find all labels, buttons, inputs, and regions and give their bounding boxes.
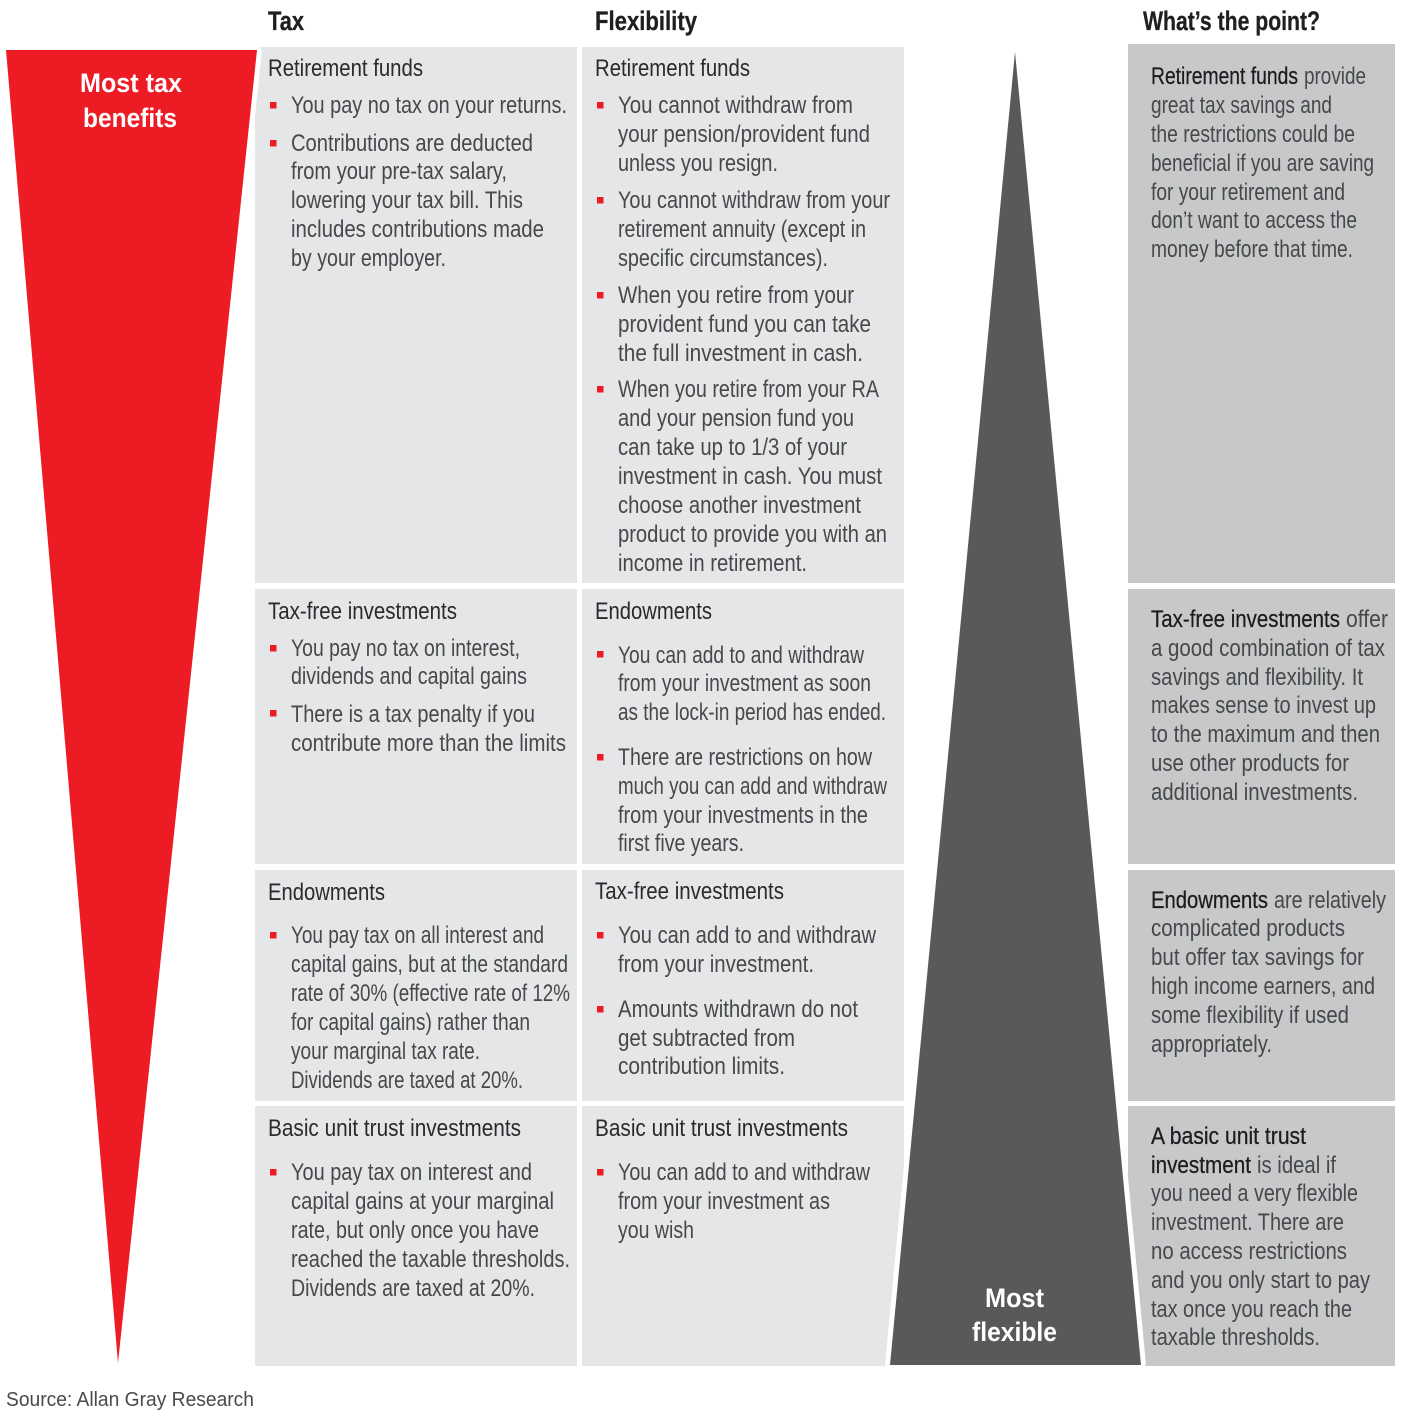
panel: tax, tax-free investments bbox=[255, 589, 577, 864]
triangle label: flexible bbox=[972, 1317, 1057, 1347]
bullet point: specific circumstances). bbox=[618, 245, 828, 272]
bullet point bbox=[597, 996, 858, 1080]
panel: flexibility, retirement funds bbox=[582, 47, 904, 583]
explanation text: complicated products bbox=[1151, 915, 1345, 942]
bullet point: your pension/provident fund bbox=[618, 121, 870, 148]
explanation text: use other products for bbox=[1151, 750, 1349, 777]
panel: point, endowments bbox=[1128, 870, 1395, 1101]
panel background bbox=[255, 47, 577, 583]
explanation text: you need a very flexible bbox=[1151, 1180, 1358, 1207]
explanation text: taxable thresholds. bbox=[1151, 1324, 1320, 1351]
bullet point bbox=[597, 922, 877, 978]
triangle label: Most tax bbox=[80, 68, 182, 98]
triangle shape bbox=[6, 50, 257, 1363]
bullet point: You pay no tax on your returns. bbox=[291, 92, 567, 119]
bullet point bbox=[270, 701, 566, 757]
panel background bbox=[255, 1106, 577, 1366]
bullet point: investment in cash. You must bbox=[618, 463, 882, 490]
panel background bbox=[255, 589, 577, 864]
bullet point bbox=[270, 1159, 570, 1302]
explanation text: provide bbox=[1304, 63, 1366, 90]
panel background bbox=[1128, 1106, 1395, 1366]
bullet point: income in retirement. bbox=[618, 550, 807, 577]
bullet point: rate, but only once you have bbox=[291, 1217, 539, 1244]
bullet point: the full investment in cash. bbox=[618, 340, 863, 367]
heading: Tax: Tax bbox=[268, 6, 304, 36]
bullet point: reached the taxable thresholds. bbox=[291, 1246, 570, 1273]
explanation text: additional investments. bbox=[1151, 779, 1358, 806]
red triangle: most tax benefits bbox=[6, 50, 257, 1363]
bullet point bbox=[597, 744, 888, 857]
panel title: Endowments bbox=[595, 598, 712, 625]
bullet point: You cannot withdraw from bbox=[618, 92, 853, 119]
explanation text bbox=[1151, 606, 1388, 806]
bullet point: You pay tax on all interest and bbox=[291, 922, 544, 949]
panel title: Retirement funds bbox=[268, 55, 423, 82]
panel background bbox=[582, 589, 904, 864]
explanation text: is ideal if bbox=[1257, 1152, 1336, 1179]
bullet point: capital gains, but at the standard bbox=[291, 951, 568, 978]
bullet point: from your investment. bbox=[618, 951, 814, 978]
explanation text: A basic unit trust bbox=[1151, 1123, 1306, 1150]
explanation text: investment. There are bbox=[1151, 1209, 1344, 1236]
panel background bbox=[1128, 44, 1395, 583]
heading: Flexibility: Flexibility bbox=[595, 6, 697, 36]
triangle label bbox=[972, 1283, 1057, 1347]
bullet point: from your investments in the bbox=[618, 802, 868, 829]
bullet point: You can add to and withdraw bbox=[618, 922, 877, 949]
bullet point: You pay no tax on interest, bbox=[291, 635, 520, 662]
explanation text: don’t want to access the bbox=[1151, 207, 1357, 234]
panel: flexibility, endowments bbox=[582, 589, 904, 864]
bullet point bbox=[270, 130, 544, 272]
bullet point bbox=[597, 642, 886, 726]
bullet point: lowering your tax bill. This bbox=[291, 187, 523, 214]
bullet point: When you retire from your RA bbox=[618, 376, 879, 403]
explanation text: investment bbox=[1151, 1152, 1251, 1179]
explanation text bbox=[1151, 1123, 1370, 1351]
bullet point bbox=[597, 1159, 871, 1244]
heading: What's the point?: What’s the point? bbox=[1143, 6, 1320, 36]
bullet point: You can add to and withdraw bbox=[618, 1159, 871, 1186]
explanation text: appropriately. bbox=[1151, 1031, 1272, 1058]
bullet point bbox=[597, 282, 871, 367]
bullet point: your marginal tax rate. bbox=[291, 1038, 480, 1065]
bullet point: first five years. bbox=[618, 830, 744, 857]
explanation text bbox=[1151, 887, 1386, 1058]
panel background bbox=[582, 870, 904, 1101]
panel background bbox=[582, 47, 904, 583]
bullet point bbox=[597, 376, 887, 577]
panel title: Basic unit trust investments bbox=[268, 1115, 521, 1142]
bullet point bbox=[270, 635, 527, 690]
bullet point: dividends and capital gains bbox=[291, 663, 527, 690]
panel title: Retirement funds bbox=[595, 55, 750, 82]
panel title: Tax-free investments bbox=[595, 878, 784, 905]
bullet point: contribution limits. bbox=[618, 1053, 785, 1080]
explanation text: savings and flexibility. It bbox=[1151, 664, 1363, 691]
bullet point: for capital gains) rather than bbox=[291, 1009, 530, 1036]
bullet point: You can add to and withdraw bbox=[618, 642, 865, 669]
bullet point: You pay tax on interest and bbox=[291, 1159, 532, 1186]
bullet point: retirement annuity (except in bbox=[618, 216, 866, 243]
panel background bbox=[255, 870, 577, 1101]
bullet point: capital gains at your marginal bbox=[291, 1188, 554, 1215]
panel: tax, endowments bbox=[255, 870, 577, 1101]
explanation text: Endowments bbox=[1151, 887, 1268, 914]
explanation text: the restrictions could be bbox=[1151, 121, 1355, 148]
bullet point: When you retire from your bbox=[618, 282, 854, 309]
panel background bbox=[1128, 589, 1395, 864]
bullet point: by your employer. bbox=[291, 245, 446, 272]
bullet point: choose another investment bbox=[618, 492, 861, 519]
bullet point: rate of 30% (effective rate of 12% bbox=[291, 980, 570, 1007]
panel: tax, basic unit trust investments bbox=[255, 1106, 577, 1366]
bullet point: and your pension fund you bbox=[618, 405, 854, 432]
bullet point: Dividends are taxed at 20%. bbox=[291, 1067, 523, 1094]
bullet point: you wish bbox=[618, 1217, 694, 1244]
panel: point, retirement funds bbox=[1128, 44, 1395, 583]
bullet point: can take up to 1/3 of your bbox=[618, 434, 847, 461]
bullet point: provident fund you can take bbox=[618, 311, 871, 338]
panel: point, basic unit trust investment bbox=[1128, 1106, 1395, 1366]
panel background bbox=[582, 1106, 904, 1366]
explanation text bbox=[1151, 63, 1374, 263]
grey triangle: most flexible bbox=[890, 52, 1141, 1365]
bullet point: You cannot withdraw from your bbox=[618, 187, 890, 214]
bullet point bbox=[597, 92, 870, 177]
triangle label: benefits bbox=[83, 103, 177, 133]
explanation text: Retirement funds bbox=[1151, 63, 1298, 90]
bullet point: as the lock-in period has ended. bbox=[618, 699, 886, 726]
panel: point, tax-free investments bbox=[1128, 589, 1395, 864]
panel: flexibility, tax-free investments bbox=[582, 870, 904, 1101]
panel background bbox=[1128, 870, 1395, 1101]
triangle label: Most bbox=[985, 1283, 1044, 1313]
source note: Source: Allan Gray Research bbox=[6, 1389, 254, 1411]
explanation text: tax once you reach the bbox=[1151, 1296, 1352, 1323]
bullet point: Dividends are taxed at 20%. bbox=[291, 1275, 535, 1302]
bullet point: from your investment as soon bbox=[618, 670, 871, 697]
bullet point: includes contributions made bbox=[291, 216, 544, 243]
explanation text: no access restrictions bbox=[1151, 1238, 1347, 1265]
triangle label bbox=[80, 68, 182, 133]
bullet point: There are restrictions on how bbox=[618, 744, 873, 771]
bullet point bbox=[270, 922, 570, 1094]
triangle shape bbox=[890, 52, 1141, 1365]
bullet point: unless you resign. bbox=[618, 150, 778, 177]
bullet point: product to provide you with an bbox=[618, 521, 887, 548]
panel title: Endowments bbox=[268, 879, 385, 906]
explanation text: some flexibility if used bbox=[1151, 1002, 1349, 1029]
bullet point: from your investment as bbox=[618, 1188, 830, 1215]
explanation text: great tax savings and bbox=[1151, 92, 1332, 119]
panel: flexibility, basic unit trust investments bbox=[582, 1106, 904, 1366]
bullet point: Contributions are deducted bbox=[291, 130, 533, 157]
explanation text: Tax-free investments bbox=[1151, 606, 1340, 633]
explanation text: offer bbox=[1346, 606, 1388, 633]
bullet point: much you can add and withdraw bbox=[618, 773, 888, 800]
bullet point: There is a tax penalty if you bbox=[291, 701, 535, 728]
panel title: Tax-free investments bbox=[268, 598, 457, 625]
panel: tax, retirement funds bbox=[255, 47, 577, 583]
panel title: Basic unit trust investments bbox=[595, 1115, 848, 1142]
explanation text: but offer tax savings for bbox=[1151, 944, 1364, 971]
bullet point bbox=[597, 187, 890, 272]
bullet point: from your pre-tax salary, bbox=[291, 158, 507, 185]
explanation text: for your retirement and bbox=[1151, 179, 1345, 206]
explanation text: money before that time. bbox=[1151, 236, 1353, 263]
bullet point: contribute more than the limits bbox=[291, 730, 566, 757]
bullet point: get subtracted from bbox=[618, 1025, 795, 1052]
bullet point: Amounts withdrawn do not bbox=[618, 996, 858, 1023]
